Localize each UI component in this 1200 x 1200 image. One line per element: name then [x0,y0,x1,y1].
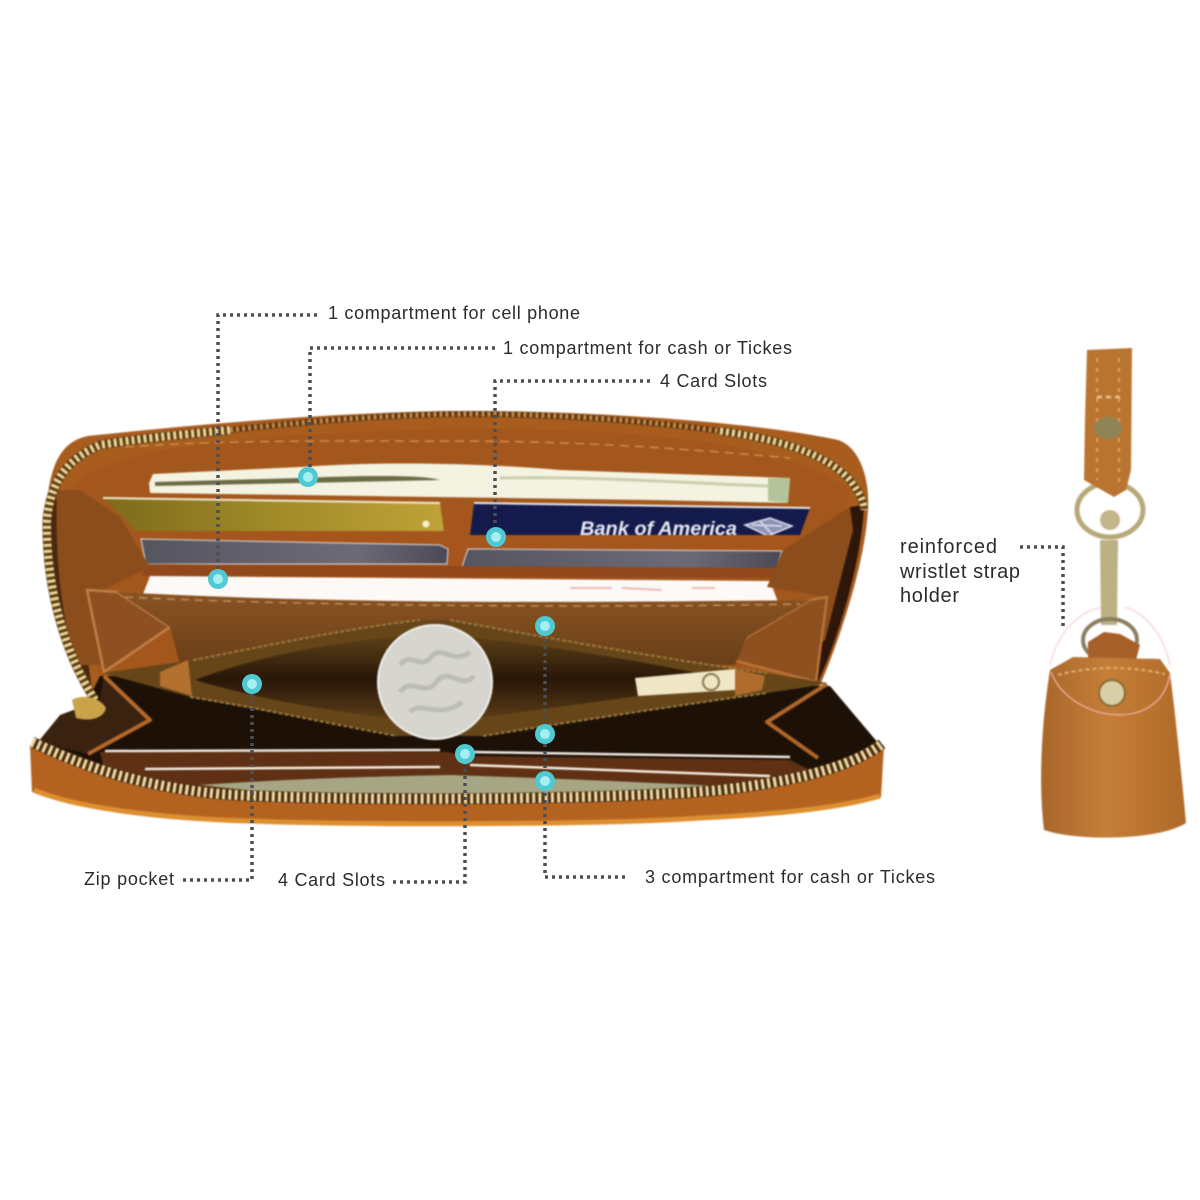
illustration: wristlet strap holder [1041,348,1186,838]
left flap [57,490,150,665]
illustration: open zip wallet [30,411,884,825]
leather band below cards [142,564,780,578]
zip pocket edge stitching [190,620,767,736]
pale guide arc [1050,607,1170,665]
leather slot band [128,500,812,566]
callout: 4 Card Slots, bottom [278,744,475,890]
left inner shadow [50,490,92,690]
keeper rivet [1099,680,1125,706]
gold card [103,498,444,531]
callout: 3 compartment for cash or Tickes: 3 compartment for cash or Tickes [645,867,935,887]
upper interior back panel [62,428,850,680]
lower dark interior [30,676,884,796]
right inner shadow [798,505,864,682]
upper ring [1077,483,1143,537]
zipper puller [72,697,106,720]
upper zipper left [47,430,230,700]
callout: 1 compartment for cash or Tickes: 1 compartment for cash or Tickes [503,338,792,358]
left zip tab [160,660,192,696]
left lower gusset [38,676,150,754]
callout: 1 compartment for cash or Tickes [298,338,792,487]
callout: 4 Card Slots, bottom: 4 Card Slots [278,870,385,890]
cash in upper compartment [149,463,790,503]
zip pocket opening [195,634,745,724]
upper zipper right [720,431,864,510]
callout: 1 compartment for cell phone [208,303,580,589]
lower card slots [100,750,820,796]
right lower gusset edge [767,684,827,758]
keeper flap seam [1051,672,1170,715]
keeper flap stitching [1058,668,1165,675]
strap end [1084,348,1132,497]
grey card right [462,549,782,569]
lower zipper [32,742,882,799]
swivel clasp [1100,510,1120,530]
left gusset [87,590,170,672]
middle divider panel [117,592,810,665]
right flap [767,507,853,663]
grey card left [141,539,448,564]
right gusset [733,597,827,682]
lower orange edge [34,790,880,824]
zip pocket body [103,620,827,736]
callout: Zip pocket: Zip pocket [84,869,174,889]
card brand text: Bank of America [580,519,737,540]
callout: 3 compartment for cash or Tickes [535,616,935,887]
upper zipper top [230,414,720,431]
right zipper pull [635,669,765,696]
back panel stitching [125,441,790,458]
callout: 4 Card Slots, top: 4 Card Slots [660,371,767,391]
card brand flag icon [745,518,792,536]
callout: 1 compartment for cell phone: 1 compartment for cell phone [328,303,580,323]
left lower gusset edge [88,676,150,754]
lower leather front band [30,745,884,825]
outer leather shell, upper half [46,411,868,700]
leather keeper body [1041,657,1186,838]
callout: reinforced wristlet strap holder: reinforced [900,536,997,558]
coin [378,625,492,739]
blue bank card [470,503,810,540]
leather knot [1088,632,1140,660]
callout: 4 Card Slots, top [486,371,767,547]
callout: reinforced wristlet strap holder: wristlet strap [899,561,1020,583]
lower ring [1083,619,1137,661]
callout: reinforced wristlet strap holder [899,536,1063,626]
callout: reinforced wristlet strap holder: holder [900,585,959,607]
phone in compartment [140,576,778,602]
clasp bar [1100,540,1118,625]
callout: Zip pocket [84,674,262,889]
divider stitching [125,597,800,606]
